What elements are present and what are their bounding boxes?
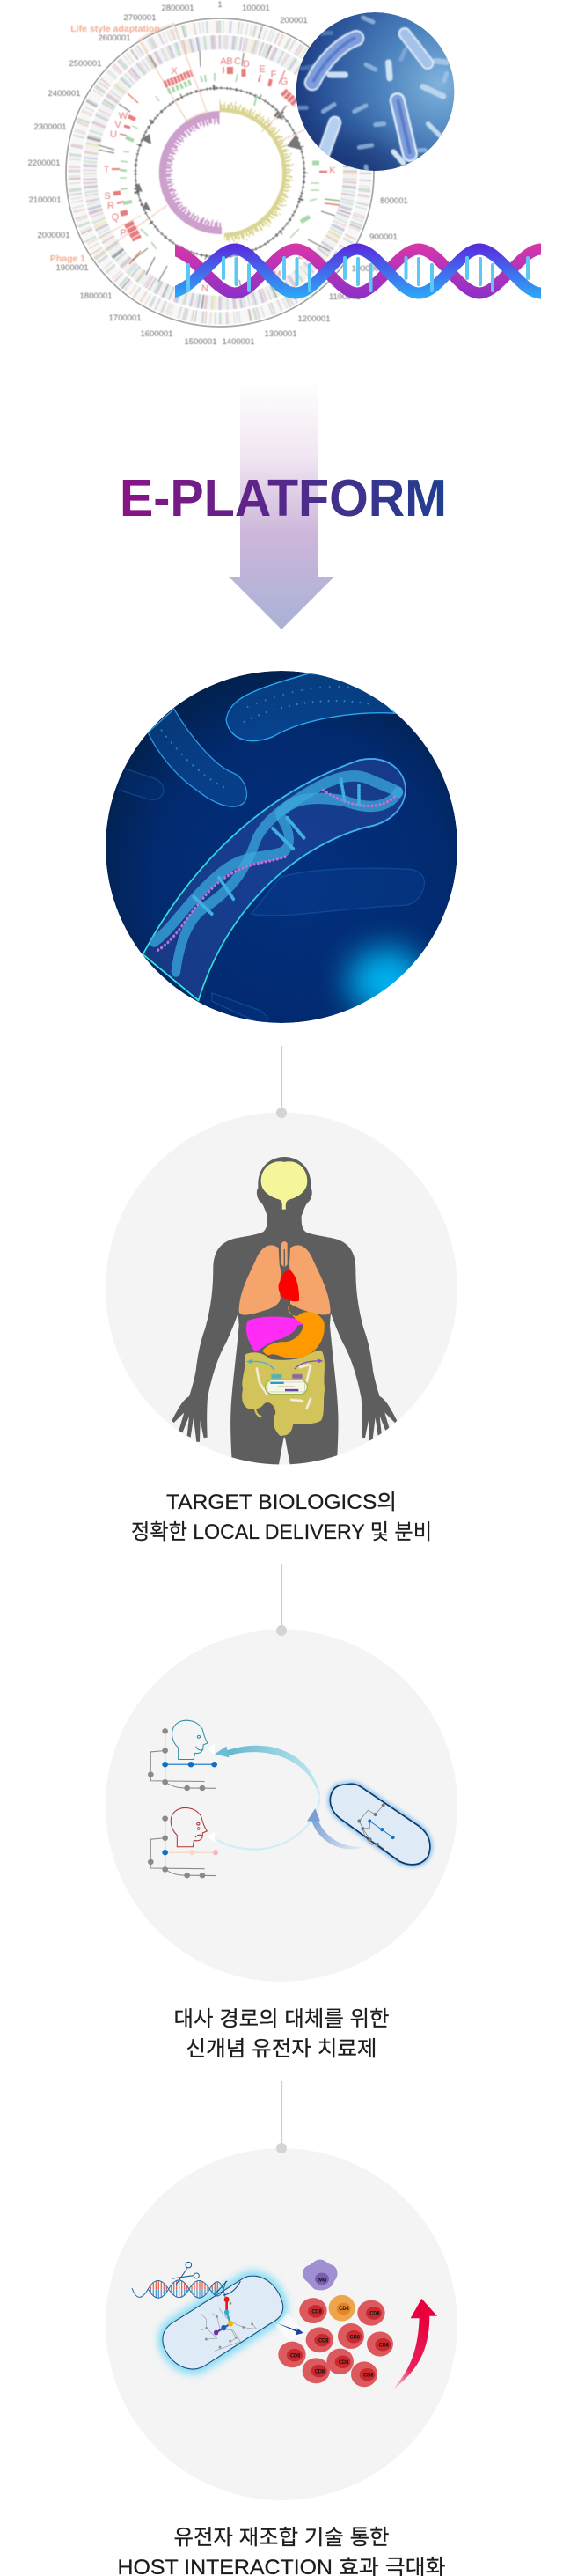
feature letters: V	[114, 120, 121, 130]
icon: healthy head	[172, 1720, 215, 1759]
GC content ring	[134, 87, 305, 258]
CD8 cell row three middle: CD8	[339, 2360, 349, 2366]
feature letters	[104, 56, 336, 294]
heart	[279, 1269, 299, 1301]
region names	[50, 24, 160, 264]
genome position labels: 2300001	[34, 122, 66, 132]
chart: circular genome map	[28, 0, 408, 347]
background circle	[106, 1113, 457, 1465]
body silhouette	[172, 1157, 397, 1466]
teal and purple blobs	[271, 1374, 303, 1379]
genome position labels: 800001	[380, 196, 408, 206]
CD8 cell right: CD8	[369, 2312, 380, 2317]
green feature ticks	[120, 73, 340, 249]
panel: genome map and DNA header	[28, 0, 541, 347]
genome position labels: 200001	[280, 16, 308, 26]
arrow: circular upper	[215, 1746, 320, 1799]
caption: 유전자 재조합 기술 통한	[174, 2526, 389, 2550]
CD8 cell row four right: CD8	[363, 2373, 374, 2378]
connector dot	[276, 1625, 287, 1636]
icon: bacterium	[330, 1784, 430, 1865]
heading: E-PLATFORM: E-PLATFORM	[120, 469, 447, 527]
dark feature spokes	[99, 51, 335, 296]
genome position labels: 1000001	[352, 264, 384, 274]
genome position labels: 2700001	[124, 13, 156, 23]
arrow: red increase	[391, 2299, 437, 2391]
genome position labels: 1800001	[80, 291, 112, 301]
genome position labels: 1700001	[109, 313, 141, 323]
connector line	[282, 2081, 283, 2148]
feature letters: W	[119, 111, 128, 121]
feature letters: F	[271, 70, 277, 80]
genome position labels: 2400001	[48, 89, 80, 99]
recombinant coloured pathway	[214, 2297, 233, 2335]
faint background rods	[119, 769, 424, 1023]
CD4 cell: CD4	[339, 2307, 349, 2312]
CD8 cell row two: CD8	[318, 2338, 329, 2344]
genome position labels	[28, 0, 408, 347]
genome position labels: 1400001	[223, 337, 254, 347]
caption	[174, 2007, 389, 2061]
feature letters: K	[329, 166, 336, 176]
genome position labels: 1600001	[141, 329, 172, 339]
icon: human body with organs	[172, 1157, 397, 1466]
large rod four	[324, 122, 335, 152]
lungs	[239, 1241, 331, 1315]
feature letters: C	[234, 56, 241, 67]
feature letters: M	[273, 269, 282, 280]
panel: host interaction	[106, 2081, 457, 2576]
stomach	[262, 1306, 325, 1358]
feature letters: X	[171, 66, 178, 77]
feature letters: L	[298, 251, 303, 261]
feature letters: S	[104, 191, 111, 202]
feature letters: D	[243, 59, 250, 70]
teal arrow	[246, 1359, 274, 1372]
arrow: downward gradient arrow	[229, 380, 334, 629]
brain	[261, 1161, 307, 1210]
feature letters: A	[220, 56, 227, 67]
feature letters: G	[281, 77, 288, 87]
feature letters: B	[226, 56, 233, 67]
outer ring outline	[66, 18, 374, 327]
arrow: circular lower	[217, 1798, 319, 1850]
genome position labels: 1	[217, 0, 223, 10]
region names: Life style adaptation	[70, 24, 160, 34]
genome position labels: 2600001	[99, 33, 130, 43]
caption: 대사 경로의 대체를 위한	[174, 2007, 389, 2031]
small rods	[299, 18, 447, 171]
DNA strands in rod	[154, 776, 398, 971]
panel: metabolic pathway replacement	[106, 1564, 457, 2061]
CD8 cell row two right: CD8	[379, 2343, 390, 2348]
gray metabolic network	[201, 2308, 257, 2351]
connector dot	[276, 2143, 287, 2153]
CD8 cell row two middle: CD8	[350, 2336, 361, 2341]
feature letters: T	[104, 165, 110, 175]
genome position labels: 1900001	[56, 263, 88, 273]
icon: sick head	[171, 1807, 215, 1847]
feature letters: E	[259, 64, 266, 75]
genome position labels: 2000001	[38, 231, 69, 240]
feature letters: U	[110, 129, 117, 140]
feature letters: R	[107, 201, 114, 211]
caption: TARGET BIOLOGICS의	[166, 1490, 397, 1514]
icon: DNA with scissors	[132, 2262, 240, 2298]
genome position labels: 1100001	[329, 292, 361, 302]
image: bacteria inset	[296, 12, 454, 171]
region names: Phage 1	[50, 254, 85, 264]
genome position labels: 1500001	[185, 337, 216, 347]
immune cells	[278, 2295, 393, 2387]
genome position labels: 2200001	[28, 158, 60, 168]
caption: 정확한 LOCAL DELIVERY 및 분비	[131, 1520, 432, 1544]
connector line	[282, 1564, 283, 1630]
genome position labels: 2100001	[29, 195, 61, 205]
icon: recombinant bacterium	[163, 2276, 283, 2369]
feature letters: P	[120, 228, 127, 239]
cyan glow	[348, 948, 426, 1015]
large rod one	[312, 38, 356, 83]
genome position labels: 2500001	[69, 59, 101, 69]
intestines	[242, 1351, 325, 1436]
genome position labels: 1300001	[265, 329, 296, 339]
feature letters: Q	[112, 212, 120, 223]
DNA rungs	[188, 258, 528, 291]
genome position labels: 1200001	[298, 314, 330, 324]
arrow: from bacterium	[307, 1808, 368, 1849]
background circle	[106, 2148, 457, 2500]
genome position labels: 900001	[369, 232, 398, 242]
connector dot	[276, 1108, 287, 1118]
icon: macrophage	[303, 2259, 338, 2290]
deficient pathway network	[148, 1815, 218, 1878]
red feature blocks	[112, 67, 340, 264]
caption: 신개념 유전자 치료제	[186, 2037, 377, 2061]
CD8 cell row three left: CD8	[290, 2353, 301, 2359]
caption	[131, 1490, 432, 1544]
icon: macrophage: Mφ	[318, 2277, 327, 2283]
purple arrow	[295, 1358, 323, 1369]
upper rod	[226, 673, 395, 741]
connector line	[282, 1046, 283, 1113]
liver	[246, 1316, 305, 1351]
large rod two	[405, 33, 428, 63]
image: bacterium containing DNA	[106, 671, 457, 1023]
panel: target biologics	[106, 1046, 457, 1544]
orange sector markers	[88, 24, 305, 258]
gene tracks	[74, 26, 366, 319]
genome position labels: 100001	[242, 4, 270, 13]
large rod three	[398, 100, 410, 154]
arrow: to immune cells	[275, 2313, 303, 2342]
background circle	[106, 1630, 457, 1982]
CD8 cell row four: CD8	[315, 2369, 325, 2374]
caption	[118, 2526, 445, 2576]
healthy pathway network	[148, 1728, 217, 1791]
CD8 cell row one: CD8	[311, 2309, 322, 2315]
genome position labels: 2800001	[162, 4, 194, 13]
icon: DNA double helix	[167, 249, 541, 293]
bacterium pill	[266, 1380, 307, 1395]
main rod	[143, 759, 406, 1000]
yellow and purple skew bands	[163, 101, 293, 244]
left rod	[148, 709, 246, 806]
feature letters: N	[201, 283, 208, 294]
